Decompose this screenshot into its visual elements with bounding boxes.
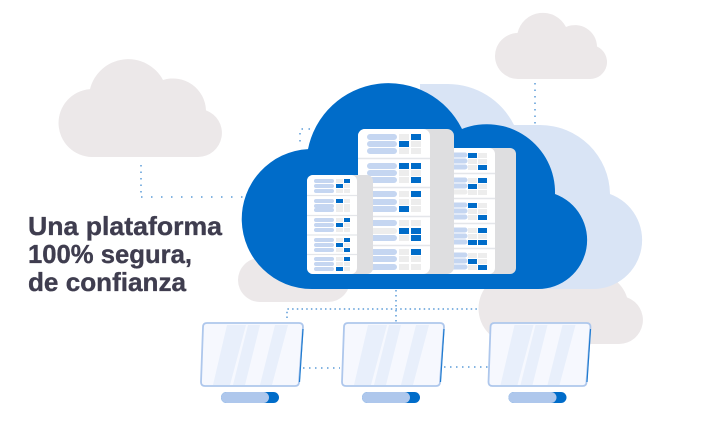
cloud: light blue back	[420, 84, 642, 289]
line: left cloud to main cloud	[141, 196, 243, 198]
server rack: left	[307, 175, 373, 274]
title: Una plataforma	[28, 211, 223, 241]
monitor 3	[488, 323, 590, 403]
cloud: bottom right grey	[478, 273, 643, 344]
title: de confianza	[28, 267, 187, 297]
connector lines	[141, 83, 535, 368]
monitor 2	[342, 323, 444, 403]
cloud: top left grey	[59, 59, 222, 157]
title: 100% segura,	[28, 239, 192, 269]
cloud: top right grey	[495, 13, 607, 79]
line: dots near main cloud	[300, 129, 310, 146]
line: main cloud to centre monitor	[395, 290, 397, 323]
cloud: bottom left grey	[238, 258, 350, 302]
line: monitor 1 to 2	[303, 367, 340, 369]
cloud: main blue	[242, 83, 587, 289]
server rack: centre	[358, 129, 454, 274]
line: left cloud vertical	[140, 165, 142, 197]
line: top right cloud to main cloud	[534, 83, 536, 125]
server rack: right	[440, 148, 516, 274]
monitor 1	[201, 323, 303, 403]
line: network bus	[287, 309, 480, 318]
line: monitor 2 to 3	[444, 366, 488, 368]
